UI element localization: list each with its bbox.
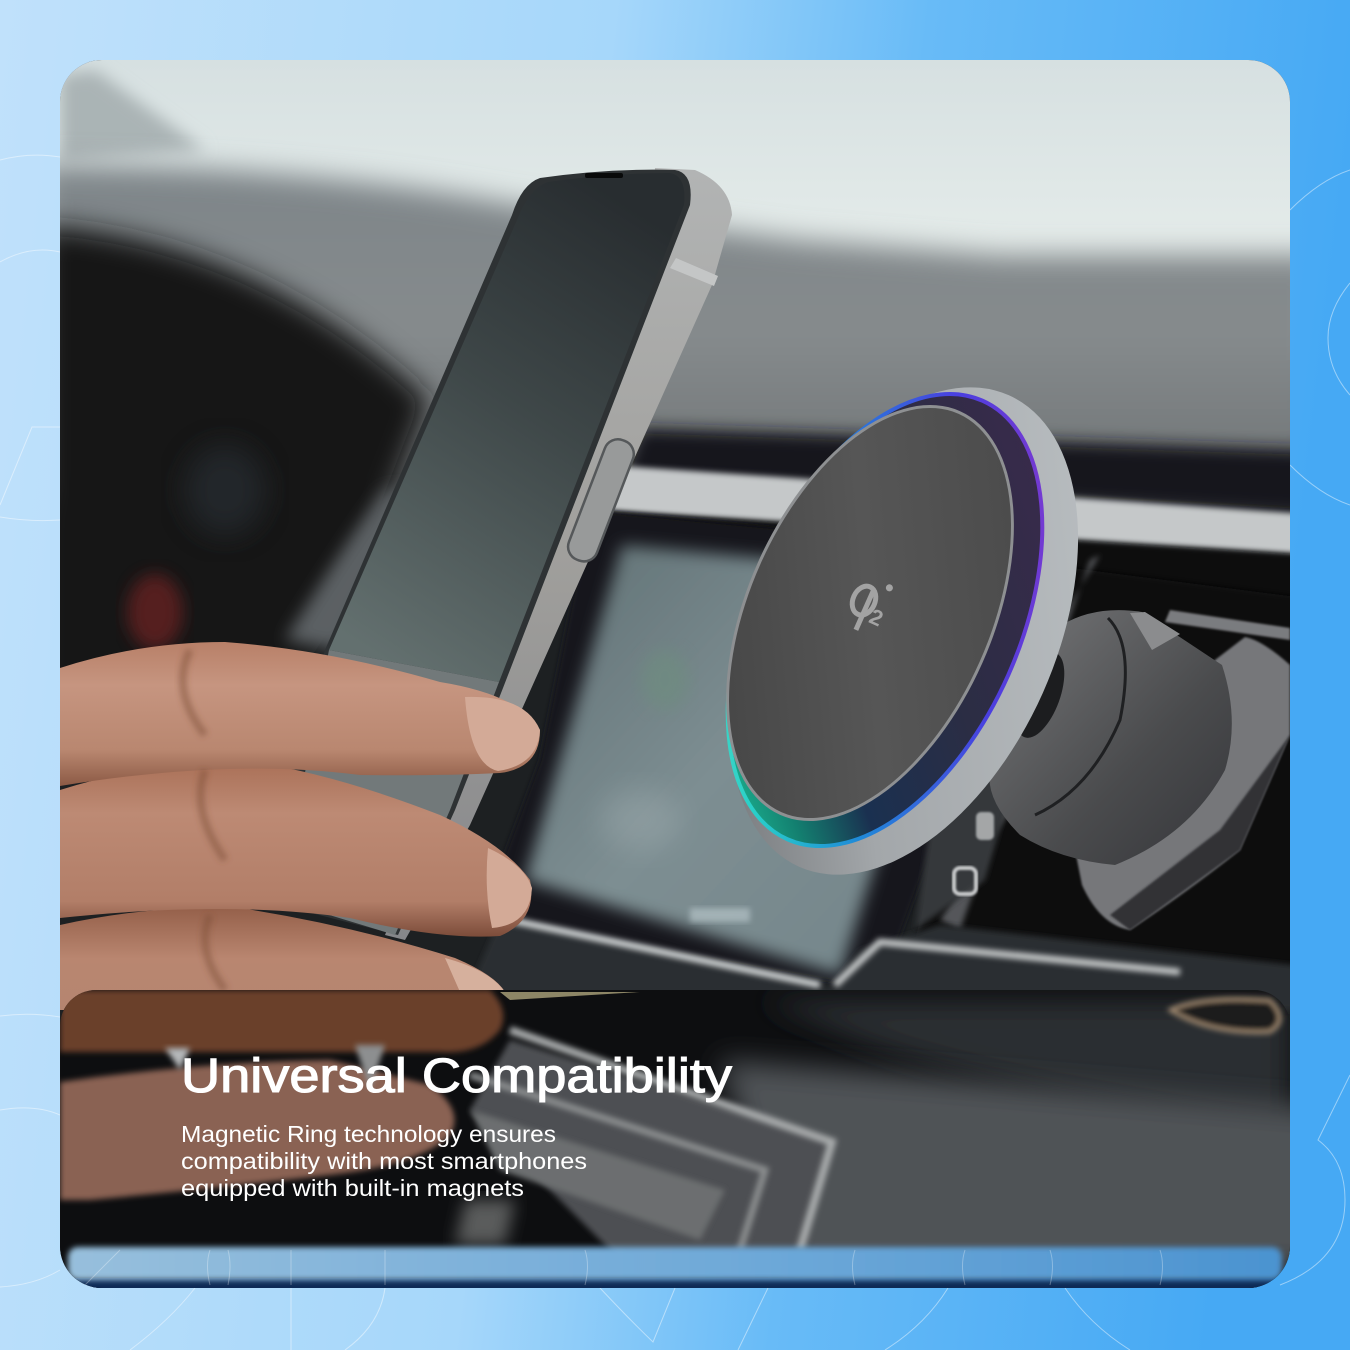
black charging disc [729, 408, 1011, 818]
centre display [506, 508, 924, 981]
blurred finger reflection lower [60, 1060, 454, 1200]
rgb light ring [726, 392, 1044, 848]
heading: Universal Compatibility [181, 1050, 732, 1103]
windshield background [60, 60, 1290, 279]
blurred dashboard right [760, 1000, 1290, 1130]
blurred console buttons [468, 1038, 795, 1250]
dashboard top [40, 165, 1320, 500]
qi2 logo [850, 584, 893, 631]
bottom blue strip [68, 1247, 1282, 1280]
phone screen [260, 170, 691, 935]
lower dash and vent [460, 555, 1320, 1010]
iridescent highlight [500, 992, 640, 1000]
finger creases [183, 650, 225, 990]
black charging disc rim [726, 405, 1014, 821]
phone side frame [385, 168, 732, 940]
body text: Magnetic Ring technology ensures [181, 1121, 556, 1147]
strip pattern lines [85, 1250, 1162, 1285]
red cluster blur [127, 574, 183, 650]
silver outer ring [738, 387, 1078, 874]
second finger [60, 760, 531, 937]
panel base [60, 990, 1290, 1288]
inner recess [733, 396, 1040, 844]
ball joint housing [989, 610, 1232, 865]
third finger [60, 908, 505, 1010]
magnetic wireless charger mount [726, 387, 1290, 931]
side button [566, 438, 636, 563]
body text: compatibility with most smartphones [181, 1148, 587, 1174]
first finger [60, 642, 540, 786]
dark vent band [620, 428, 1320, 515]
body text [181, 1121, 587, 1201]
bottom edge dark band [60, 1278, 1290, 1288]
qi2 logo: 2 [866, 604, 887, 631]
dark instrument cluster [40, 225, 430, 720]
blurred finger reflection top [60, 990, 503, 1052]
wiper blur top left [60, 70, 205, 160]
fingernails [465, 697, 540, 771]
vent clip bracket [1075, 637, 1290, 930]
body text: equipped with built-in magnets [181, 1175, 524, 1201]
hand with three fingers [60, 642, 540, 1010]
silver trim [610, 466, 1320, 556]
frosted caption panel [60, 990, 1330, 1288]
phone [260, 168, 732, 940]
